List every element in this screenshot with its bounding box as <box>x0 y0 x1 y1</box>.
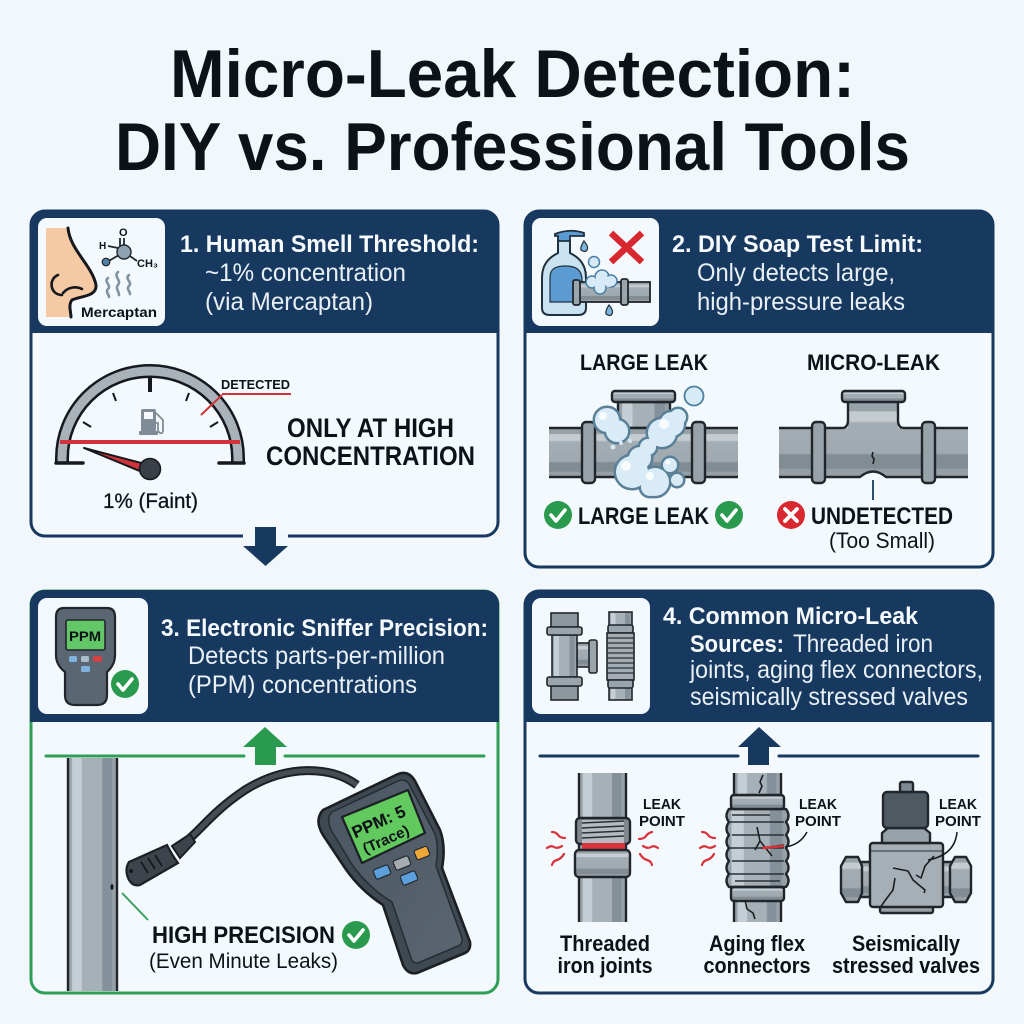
callout: high precision <box>149 921 370 973</box>
callout: only at high concentration: ONLY AT HIGH <box>287 413 454 443</box>
title: Micro-Leak Detection: <box>170 36 855 112</box>
illustration: micro-leak pipe <box>779 391 968 500</box>
column heading: large leak: LARGE LEAK <box>580 350 708 375</box>
header text 3: Detects parts-per-million <box>188 642 445 670</box>
leak squiggles <box>547 832 658 865</box>
icon: PPM meter: PPM <box>69 628 101 644</box>
leader line to leak <box>122 893 148 920</box>
leak point label <box>639 796 685 830</box>
header text 4: joints, aging flex connectors, <box>689 656 983 684</box>
header text 4: Threaded iron <box>793 630 933 658</box>
leak point label: LEAK <box>643 796 681 813</box>
caption: seismically stressed valves <box>832 931 980 978</box>
icon: soap bottle on pipe <box>532 218 659 326</box>
header band 4 <box>524 590 994 722</box>
status: large leak detected: LARGE LEAK <box>578 503 710 530</box>
header text 2: high-pressure leaks <box>697 288 905 316</box>
header text 4: Sources: <box>690 631 784 658</box>
gauge chart: 1% (Faint) <box>103 490 198 513</box>
icon: PPM meter <box>38 598 148 714</box>
header text 4: seismically stressed valves <box>690 683 968 711</box>
source: threaded iron joint <box>547 773 685 922</box>
illustration: large leak pipe with soap bubbles <box>549 386 738 497</box>
source: seismically stressed valve <box>841 782 981 913</box>
arrow: green up <box>243 727 287 765</box>
leak point label: LEAK <box>939 796 977 813</box>
gauge chart: DETECTED <box>221 378 290 392</box>
header band 2 <box>524 211 994 333</box>
header text 1: 1. Human Smell Threshold: <box>180 231 479 258</box>
caption: seismically stressed valves: Seismically <box>852 931 961 956</box>
header band 3 <box>30 590 499 722</box>
status: undetected too small <box>777 501 953 553</box>
meter screen: PPM: 5 <box>349 802 409 842</box>
illustration: sniffer probe and cable <box>126 771 357 885</box>
status: undetected too small: (Too Small) <box>829 528 935 553</box>
header text 3: 3. Electronic Sniffer Precision: <box>161 615 488 642</box>
panel: 2 soap test <box>524 211 994 567</box>
header text 2 <box>672 231 923 316</box>
icon: nose and mercaptan <box>38 218 165 326</box>
leak point label: POINT <box>639 813 685 830</box>
leader line <box>928 832 957 860</box>
arrow: panel 1 down to panel 3 <box>243 527 288 566</box>
callout: only at high concentration <box>266 413 475 471</box>
callout: high precision: (Even Minute Leaks) <box>149 950 338 973</box>
source: aging flex connector <box>700 773 841 922</box>
caption: threaded iron joints: Threaded <box>560 931 650 956</box>
panel: 3 electronic sniffer <box>30 590 499 993</box>
leak point label: POINT <box>795 813 841 830</box>
title: DIY vs. Professional Tools <box>115 109 910 185</box>
caption: threaded iron joints: iron joints <box>558 953 652 978</box>
leak point label: LEAK <box>799 796 837 813</box>
caption: threaded iron joints <box>558 931 652 978</box>
leader line <box>785 832 807 847</box>
header text 1: (via Mercaptan) <box>205 288 373 316</box>
panel: 4 common sources <box>524 590 994 993</box>
meter buttons <box>373 846 430 886</box>
micro-leak point <box>110 884 114 890</box>
caption: aging flex connectors <box>704 931 810 978</box>
callout: only at high concentration: CONCENTRATION <box>266 441 475 471</box>
gauge chart <box>56 371 291 513</box>
icon: tee fitting and flex connector <box>532 598 650 714</box>
icon: nose and mercaptan: CH₃ <box>137 258 158 270</box>
header text 2: 2. DIY Soap Test Limit: <box>672 231 923 258</box>
leak point label <box>935 796 981 830</box>
green rule <box>46 754 484 758</box>
callout: high precision: HIGH PRECISION <box>152 922 335 949</box>
arrow: navy up <box>738 727 781 765</box>
meter screen: (Trace) <box>360 822 412 858</box>
header text 3: (PPM) concentrations <box>188 671 417 699</box>
panel: 1 human smell threshold <box>30 211 499 536</box>
gauge needle <box>84 448 160 480</box>
meter screen <box>342 790 425 863</box>
title <box>115 36 910 185</box>
caption: aging flex connectors: connectors <box>704 953 810 978</box>
navy rule <box>540 754 978 758</box>
header text 2: Only detects large, <box>697 259 895 287</box>
leak point label: POINT <box>935 813 981 830</box>
leak point label <box>795 796 841 830</box>
header text 4: 4. Common Micro-Leak <box>663 603 919 630</box>
icon: nose and mercaptan: Mercaptan <box>81 304 157 320</box>
icon: nose and mercaptan: O <box>119 227 128 239</box>
status: undetected too small: UNDETECTED <box>811 503 953 530</box>
header text 3 <box>161 615 488 699</box>
header band 1 <box>30 211 499 333</box>
icon: nose and mercaptan: H <box>99 241 106 252</box>
icon: red cross <box>611 233 642 262</box>
icon: fuel pump <box>139 409 163 435</box>
header text 4 <box>663 603 983 711</box>
column heading: micro-leak: MICRO-LEAK <box>807 350 940 375</box>
header text 1: ~1% concentration <box>205 259 406 287</box>
header text 1 <box>180 231 479 316</box>
caption: aging flex connectors: Aging flex <box>709 931 806 956</box>
illustration: vertical gas pipe <box>68 758 117 991</box>
illustration: sniffer handheld unit <box>318 773 470 973</box>
caption: seismically stressed valves: stressed valves <box>832 953 980 978</box>
